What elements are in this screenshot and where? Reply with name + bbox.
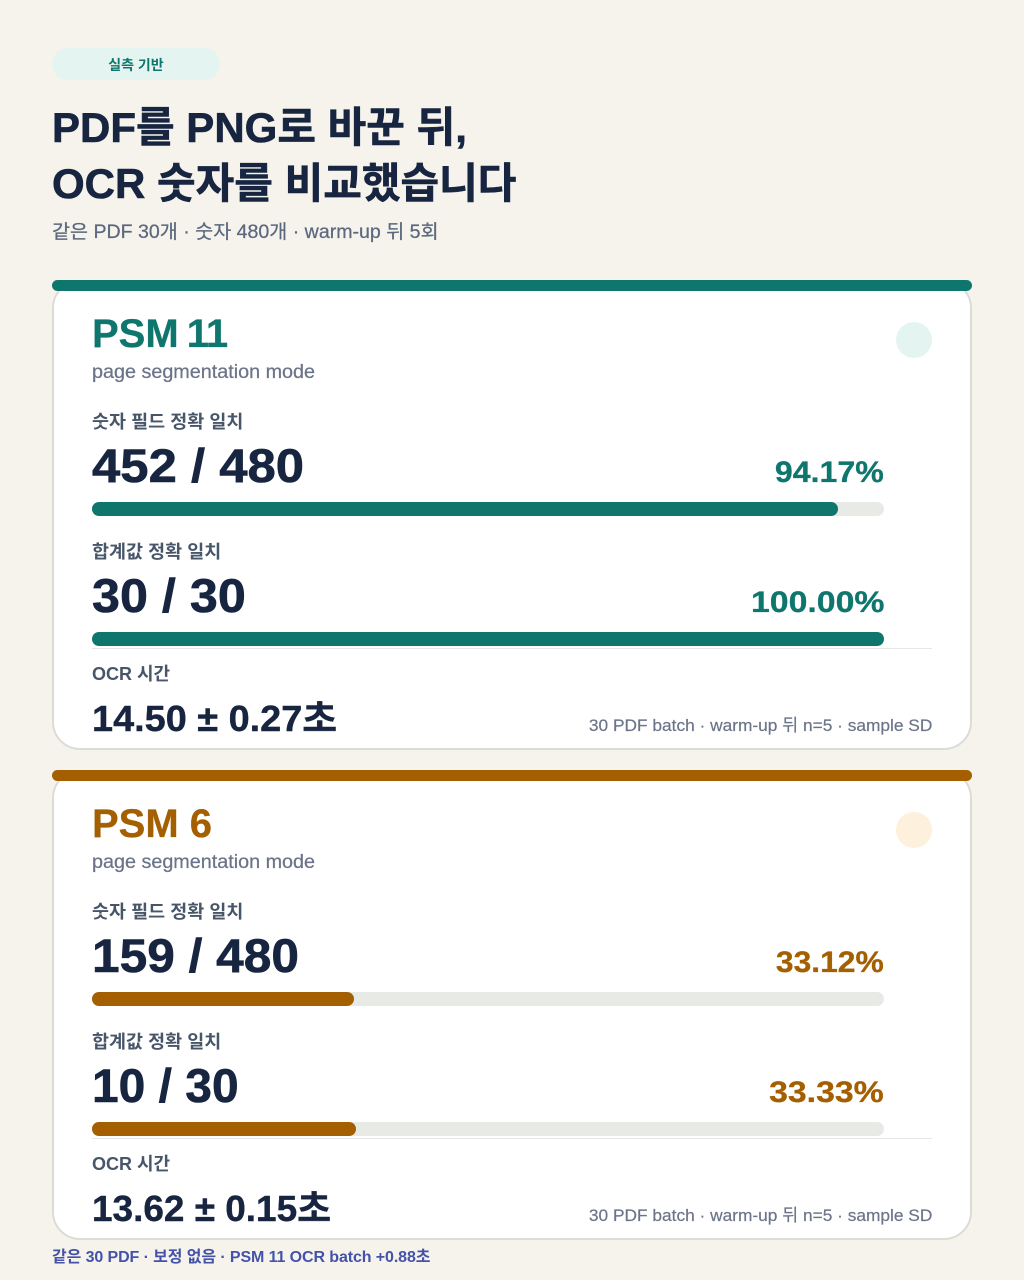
- heading: PSM 11: PSM 11: [92, 312, 227, 356]
- panel: PSM 6: [52, 770, 972, 1240]
- label: total match: 합계값 정확 일치: [92, 542, 221, 562]
- bar: total match: [92, 632, 884, 646]
- title: OCR 숫자를 비교했습니다: [52, 160, 516, 207]
- top accent bar: [52, 280, 972, 291]
- value: 159 / 480: 159 / 480: [92, 929, 299, 982]
- percentage: 33.12%: 33.12%: [776, 946, 884, 979]
- card background: [52, 280, 972, 750]
- note: measurement conditions: 30 PDF batch · warm-up 뒤 n=5 · sample SD: [589, 716, 932, 735]
- title: [52, 104, 516, 207]
- subheading: page segmentation mode: [92, 852, 315, 873]
- panel: PSM 11: [52, 280, 972, 750]
- bar fill 33.33%: [92, 1122, 356, 1136]
- bar: total match: [92, 1122, 884, 1136]
- badge: measured basis: 실측 기반: [108, 57, 164, 73]
- value: 452 / 480: 452 / 480: [92, 439, 304, 492]
- value: 30 / 30: 30 / 30: [92, 569, 246, 622]
- label: OCR time: OCR 시간: [92, 1154, 170, 1174]
- title: PDF를 PNG로 바꾼 뒤,: [52, 104, 467, 151]
- bar fill 33.12%: [92, 992, 354, 1006]
- footer note: 같은 30 PDF · 보정 없음 · PSM 11 OCR batch +0.88초: [52, 1249, 430, 1266]
- card background: [52, 770, 972, 1240]
- label: OCR time: OCR 시간: [92, 664, 170, 684]
- heading: PSM 6: PSM 6: [92, 802, 212, 846]
- bar fill 100%: [92, 632, 884, 646]
- value: OCR time: 13.62 ± 0.15초: [92, 1188, 331, 1229]
- percentage: 94.17%: 94.17%: [775, 456, 884, 489]
- label: numeric field match: 숫자 필드 정확 일치: [92, 902, 243, 922]
- icon: status dot: [896, 812, 932, 848]
- label: total match: 합계값 정확 일치: [92, 1032, 221, 1052]
- value: 10 / 30: 10 / 30: [92, 1059, 239, 1112]
- top accent bar: [52, 770, 972, 781]
- label: numeric field match: 숫자 필드 정확 일치: [92, 412, 243, 432]
- subtitle: 같은 PDF 30개 · 숫자 480개 · warm-up 뒤 5회: [52, 222, 439, 243]
- bar fill 94.17%: [92, 502, 838, 516]
- subheading: page segmentation mode: [92, 362, 315, 383]
- badge: measured basis: [52, 48, 220, 80]
- note: measurement conditions: 30 PDF batch · warm-up 뒤 n=5 · sample SD: [589, 1206, 932, 1225]
- value: OCR time: 14.50 ± 0.27초: [92, 698, 337, 739]
- icon: status dot: [896, 322, 932, 358]
- bar: numeric field match: [92, 992, 884, 1006]
- percentage: 100.00%: 100.00%: [751, 586, 884, 619]
- percentage: 33.33%: 33.33%: [769, 1076, 884, 1109]
- bar: numeric field match: [92, 502, 884, 516]
